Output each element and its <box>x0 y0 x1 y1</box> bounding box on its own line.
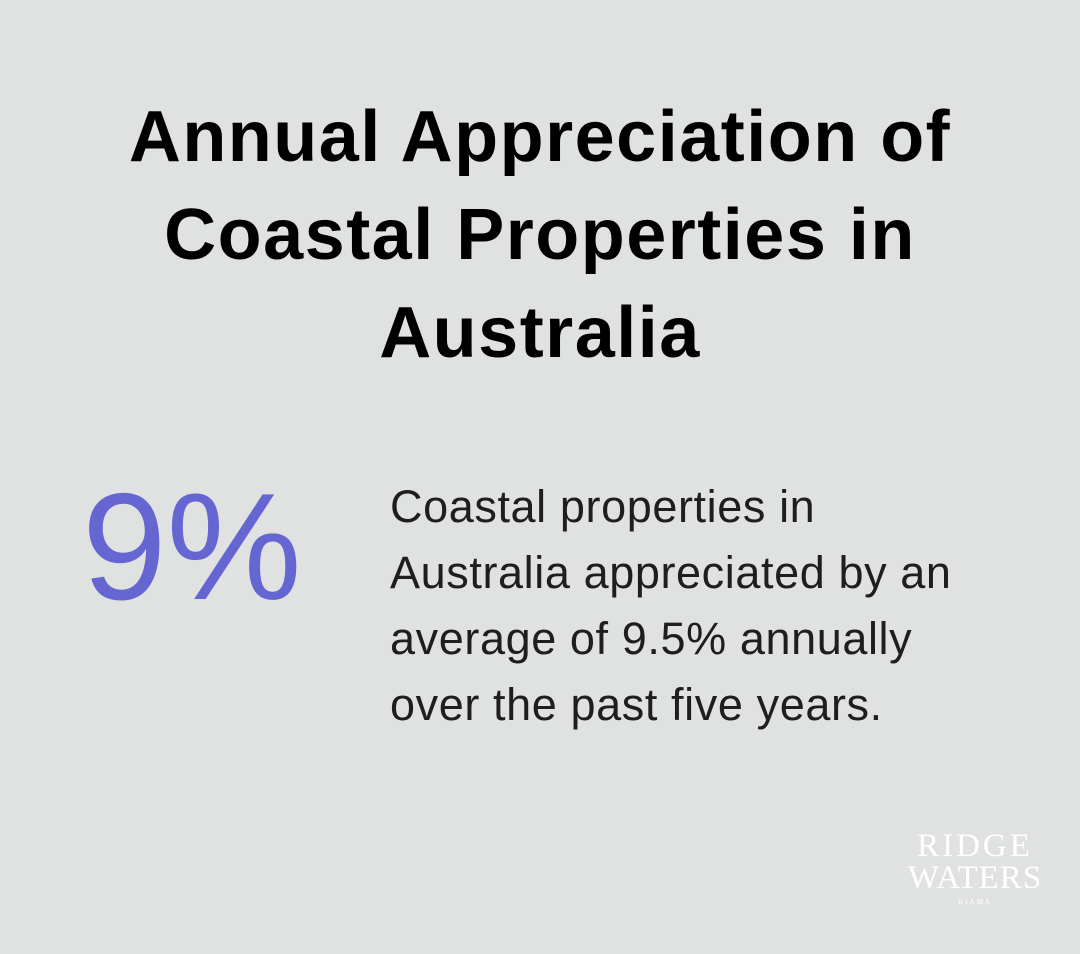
description text <box>390 481 952 730</box>
description text: Coastal properties in <box>390 481 815 532</box>
title <box>129 97 951 373</box>
logo: Ridge Waters Kiama: RIDGE <box>917 828 1033 864</box>
logo: Ridge Waters Kiama <box>908 828 1042 906</box>
title: Annual Appreciation of <box>129 97 951 177</box>
description text: over the past five years. <box>390 679 883 730</box>
stat: 9%: 9% <box>82 462 302 632</box>
logo: Ridge Waters Kiama: KIAMA <box>958 898 992 906</box>
title: Coastal Properties in <box>164 195 916 275</box>
title: Australia <box>379 293 701 373</box>
description text: average of 9.5% annually <box>390 613 912 664</box>
description text: Australia appreciated by an <box>390 547 952 598</box>
logo: Ridge Waters Kiama: WATERS <box>908 860 1042 896</box>
